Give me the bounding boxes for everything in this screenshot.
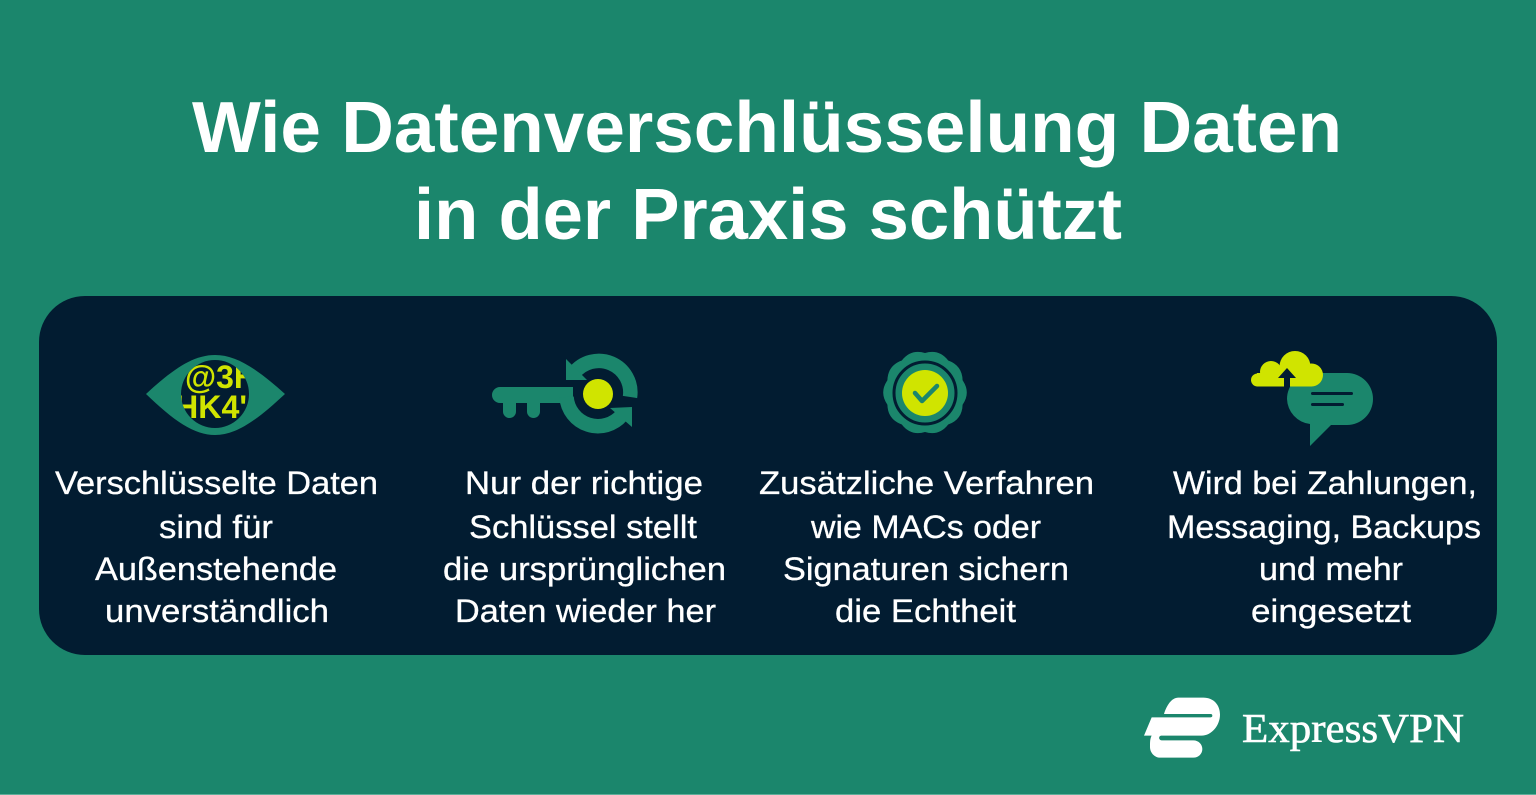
icon: eye with encrypted characters (146, 355, 285, 435)
text: additional methods: Zusätzliche Verfahren (759, 465, 1094, 501)
icon: chat bubble and cloud upload (1251, 351, 1373, 446)
text: payments, messaging, backups: Messaging, Backups (1167, 509, 1481, 545)
logo: ExpressVPN (1144, 698, 1464, 758)
text: unreadable to outsiders: unverständlich (105, 593, 329, 629)
text: only the right key restores (443, 465, 726, 629)
icon: eye with encrypted characters: @3H (185, 359, 257, 395)
text: additional methods: die Echtheit (835, 593, 1016, 629)
panel: four protection facts (39, 296, 1497, 655)
title: in der Praxis schützt (414, 175, 1122, 255)
text: unreadable to outsiders: sind für (159, 509, 273, 545)
text: only the right key restores: Daten wieder her (455, 593, 716, 629)
text: payments, messaging, backups (1167, 465, 1481, 629)
icon: eye with encrypted characters: HK4' (175, 389, 247, 425)
icon: ExpressVPN mark (1144, 698, 1220, 758)
text: additional methods: Signaturen sichern (783, 551, 1069, 587)
text: additional methods: wie MACs oder (810, 509, 1041, 545)
text: payments, messaging, backups: und mehr (1259, 551, 1403, 587)
text: unreadable to outsiders: Verschlüsselte Daten (55, 465, 378, 501)
logo: ExpressVPN: ExpressVPN (1242, 705, 1464, 751)
title: Wie Datenverschlüsselung Daten (192, 88, 1342, 168)
icon: verification badge (883, 352, 967, 433)
text: payments, messaging, backups: eingesetzt (1251, 593, 1411, 629)
text: unreadable to outsiders (55, 465, 378, 629)
title (192, 88, 1342, 255)
text: additional methods (759, 465, 1094, 629)
text: payments, messaging, backups: Wird bei Zahlungen, (1173, 465, 1477, 501)
text: unreadable to outsiders: Außenstehende (95, 551, 337, 587)
text: only the right key restores: Schlüssel stellt (469, 509, 697, 545)
text: only the right key restores: Nur der richtige (465, 465, 703, 501)
text: only the right key restores: die ursprünglichen (443, 551, 726, 587)
icon: key with circular arrows (492, 359, 632, 427)
